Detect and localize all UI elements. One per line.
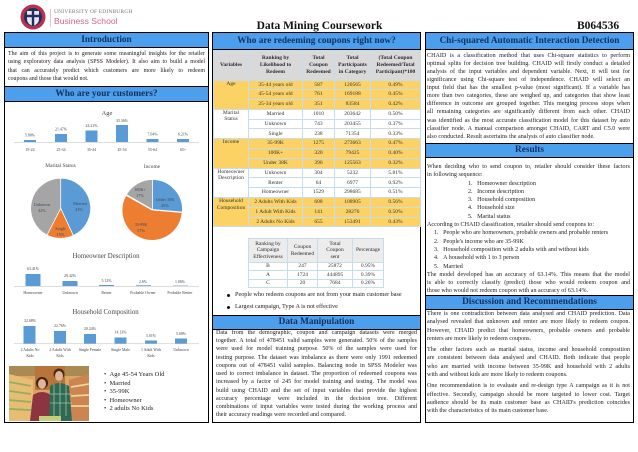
text: CHAID description: all remaining categories are significantly different from each other. CHAID <box>427 109 630 115</box>
list: campaign insights: Largest campaign, Type A is not effective <box>235 303 338 310</box>
text: data manipulation: combinations of input variables were tested during the working process and <box>216 404 417 410</box>
bar chart: homeowner description: Homeowner <box>23 291 43 295</box>
table: campaign effectiveness: B <box>266 263 270 269</box>
table: campaign effectiveness: 1724 <box>297 272 308 278</box>
list: typical customer traits <box>104 371 164 412</box>
text: data manipulation: accuracy percentage were included in the decision tree. Different <box>216 396 417 402</box>
table: likelihood to redeem: 35-99K <box>267 140 284 146</box>
bar chart: age: Age <box>102 110 113 117</box>
text: results: in following sequence: <box>427 172 483 178</box>
pie chart: income: 17% <box>136 193 144 198</box>
table: likelihood to redeem: 0.50% <box>388 209 403 215</box>
table: campaign effectiveness: Coupon <box>326 247 344 253</box>
table: likelihood to redeem: 71354 <box>346 131 359 137</box>
text: data manipulation: increased by a factor of 245 for model training and testing. The model was <box>216 379 417 385</box>
list: typical customer traits: • Age 45-54 Years Old <box>104 371 164 378</box>
text: results: 3. Household composition <box>468 197 535 203</box>
text: results: 5. Marital status <box>468 214 510 220</box>
bar chart: household composition: Single Male <box>111 348 130 352</box>
table: likelihood to redeem: 1 Adult With Kids <box>255 209 296 215</box>
text: introduction: The aim of this project is to generate some meaningful insights for the retailer <box>8 50 205 56</box>
table: campaign effectiveness: 7684 <box>330 280 340 286</box>
table: likelihood to redeem: 120565 <box>344 82 361 88</box>
bar chart: age: 35-44 <box>87 148 96 152</box>
table: campaign effectiveness: A <box>266 272 270 278</box>
table: likelihood to redeem: 0.92% <box>388 180 403 186</box>
table: likelihood to redeem: Unknown <box>265 121 286 127</box>
bar chart: household composition: Single Female <box>79 348 101 352</box>
table: campaign effectiveness: 0.39% <box>361 272 375 278</box>
table: campaign effectiveness: C <box>266 280 270 286</box>
bar chart: age: 6.21% <box>178 132 189 136</box>
table: campaign effectiveness: 0.26% <box>361 280 375 286</box>
table: campaign effectiveness: Redeemed <box>291 250 314 256</box>
bar chart: household composition: 32.08% <box>24 319 37 323</box>
table: likelihood to redeem: 5232 <box>347 170 358 176</box>
table: likelihood to redeem: 273663 <box>344 140 361 146</box>
table: likelihood to redeem: 0.43% <box>388 219 403 225</box>
text: results: 3. Household composition with 2 adults with and without kids <box>434 247 589 253</box>
text: introduction: coupons and those that would not. <box>8 76 88 82</box>
table: likelihood to redeem: 0.49% <box>388 82 403 88</box>
bar chart: age: 65+ <box>180 148 186 152</box>
table: likelihood to redeem: Single <box>268 131 283 137</box>
list: typical customer traits: • Homeowner <box>104 397 142 404</box>
text: CHAID description: optimal splits for decision tree building. CHAID will firstly conduct a detailed <box>427 61 630 67</box>
text: data manipulation: Data from the demographic, coupon and campaign datasets were merged <box>216 330 417 336</box>
bar chart: household composition: 20.24% <box>84 327 97 331</box>
text: introduction: using exploratory data analysis (SPSS Modeler). It also aim to build a model <box>8 59 205 65</box>
panel: middle column <box>212 32 421 423</box>
bar chart: homeowner description <box>14 253 199 295</box>
table: likelihood to redeem: Age <box>226 80 236 86</box>
bar chart: household composition: 5.01% <box>146 334 157 338</box>
table: likelihood to redeem: 238 <box>314 131 323 137</box>
heading: Results: Results <box>515 145 544 155</box>
text: discussion: One recommendation is to evaluate and re-design type A campaign as it is not <box>427 383 630 389</box>
table: campaign effectiveness: 444895 <box>327 272 343 278</box>
table: likelihood to redeem: Redeem <box>266 69 285 75</box>
table: likelihood to redeem: 0.42% <box>388 101 403 107</box>
heading: Introduction: Introduction <box>81 35 132 45</box>
bar chart: age: 45-54 <box>117 148 127 152</box>
table: campaign effectiveness: Effectiveness <box>253 254 283 260</box>
bar chart: household composition: Household Composition <box>72 309 139 316</box>
pie chart: marital status: 43% <box>75 207 83 212</box>
table: likelihood to redeem: 1010 <box>313 111 324 117</box>
bar chart: age: 7.04% <box>147 132 158 136</box>
bar chart: household composition: 2 Adults No <box>21 348 39 352</box>
text: data manipulation: build using CHAID and the set of input variables that provide the highest <box>216 388 417 394</box>
text: CHAID description: classifier node. A manual comparison amongst CHAID, CART and C5.0 were <box>427 126 630 132</box>
table: likelihood to redeem: Under 38K <box>263 160 288 166</box>
pie chart: marital status: Single <box>55 226 66 231</box>
text: introduction <box>8 50 205 82</box>
heading: Chi-squared Automatic Interaction Detection: Chi-squared Automatic Interaction Detection <box>440 36 619 46</box>
table: likelihood to redeem: 203642 <box>344 111 361 117</box>
text: data manipulation: testing purpose. The dataset was imbalance as there were only 1991 redeemed <box>216 355 417 361</box>
pie chart: marital status: Married <box>73 201 88 206</box>
text: discussion: However, CHAID predict that homeowners, probable owners and probable <box>427 328 630 334</box>
pie chart: marital status: 42% <box>38 208 46 213</box>
heading: Introduction <box>4 32 209 48</box>
heading: Who are redeeming coupons right now?: Who are redeeming coupons right now? <box>237 36 396 46</box>
charts: customer profile <box>14 110 199 358</box>
pie chart: income: Income <box>144 164 161 170</box>
text: discussion: effective. Secondly, campaign should be more targeted to lower cost. Target <box>427 392 630 398</box>
table: likelihood to redeem: 79425 <box>346 150 359 156</box>
text: discussion: are consistent between data analysed and CHAID. Both indicate that people <box>427 355 630 361</box>
table: likelihood to redeem: 35-44 years old <box>258 82 293 88</box>
heading: Who are your customers? <box>4 86 209 102</box>
text: results <box>427 164 630 294</box>
table: likelihood to redeem: 587 <box>314 82 323 88</box>
pie chart: income: 35-99K <box>135 222 147 227</box>
table: likelihood to redeem: Renter <box>268 180 283 186</box>
table: likelihood to redeem: Unknown <box>265 170 286 176</box>
table: likelihood to redeem: Income <box>223 139 239 145</box>
table: likelihood to redeem: 0.47% <box>388 140 403 146</box>
bar chart: homeowner description: 5.12% <box>101 279 112 283</box>
table: likelihood to redeem: 203455 <box>344 121 361 127</box>
table: likelihood to redeem: 0.37% <box>388 121 403 127</box>
table: likelihood to redeem: Participant)*100 <box>376 69 415 75</box>
bar chart: household composition: Kids <box>147 354 155 358</box>
bar chart: homeowner description: Homeowner Description <box>72 253 140 260</box>
text: discussion: who are married with income between 35-99K and household with 2 adults <box>427 364 630 370</box>
table: likelihood to redeem: in Category <box>339 69 366 75</box>
table: likelihood to redeem: 108905 <box>344 199 361 205</box>
table: campaign effectiveness: sent <box>331 254 339 260</box>
bar chart: household composition: Kids <box>56 354 64 358</box>
pie chart: marital status: 15% <box>57 232 65 237</box>
table: likelihood to redeem: Likelihood to <box>260 62 291 68</box>
table: likelihood to redeem: 64 <box>316 180 321 186</box>
bar chart: household composition: 1 Adult With <box>141 348 161 352</box>
table: campaign effectiveness: 25872 <box>328 263 342 269</box>
text: data manipulation <box>216 330 417 418</box>
bar chart: homeowner description: Probable Owner <box>130 291 156 295</box>
table: likelihood to redeem: 25-34 years old <box>258 101 293 107</box>
bar chart: household composition: 14.13% <box>114 330 127 334</box>
table: campaign effectiveness: Ranking by <box>255 241 281 247</box>
pie chart: income: 26% <box>161 203 169 208</box>
bar chart: age: 5.80% <box>25 134 36 138</box>
panel: left column <box>4 32 209 423</box>
bar chart: homeowner description: Probable Renter <box>167 291 193 295</box>
text: results: those who would not redeem coupon with an accuracy of 63.14%. <box>427 288 588 294</box>
table: likelihood to redeem: 100K+ <box>268 150 283 156</box>
bar chart: age: 25-34 <box>56 148 66 152</box>
bar chart: age: 24.21% <box>86 124 98 128</box>
table: likelihood to redeem: 761 <box>314 91 323 97</box>
table: likelihood to redeem: 1275 <box>313 140 324 146</box>
bar chart: household composition: 5.68% <box>176 332 187 336</box>
table: likelihood to redeem: 5.81% <box>388 170 403 176</box>
list: campaign insights <box>227 291 402 310</box>
pie chart: income: 100K+ <box>134 187 146 192</box>
pie chart: income <box>122 164 182 240</box>
table: campaign effectiveness: Total <box>329 241 341 247</box>
table: likelihood to redeem: Total <box>312 55 325 61</box>
text: data manipulation: their accuracy readings were recorded and compared. <box>216 412 346 418</box>
logo: University of Edinburgh Business School: UNIVERSITY OF EDINBURGH <box>54 9 133 15</box>
heading: Data Manipulation: Data Manipulation <box>279 317 354 327</box>
table: likelihood to redeem: Homeowner <box>217 169 245 175</box>
table: likelihood to redeem: 83584 <box>346 101 359 107</box>
text: CHAID description: was identified as the most accurate classification model for this dataset by auto <box>427 118 630 124</box>
bar chart: age: 35.36% <box>116 119 129 123</box>
table: likelihood to redeem: 0.33% <box>388 131 403 137</box>
table: likelihood to redeem: 608 <box>314 199 323 205</box>
text: results: 4. Household size <box>468 205 515 211</box>
logo: University of Edinburgh Business School <box>20 4 133 30</box>
list: typical customer traits: • Married <box>104 380 130 387</box>
bar chart: homeowner description: 2.6% <box>139 280 148 284</box>
text: results: 2. People's income who are 35-99K <box>434 239 524 245</box>
text: results: is able to correctly classify (predict) those who would redeem coupon and <box>427 280 630 286</box>
text: data manipulation: used to correct imbalance in dataset. The proportion of redeemed coupons was <box>216 371 417 377</box>
table: likelihood to redeem: 45-54 years old <box>258 91 293 97</box>
heading: Discussion and Recommendations: Discussion and Recommendations <box>462 297 597 307</box>
text: discussion: There is one contradiction between data analysed and CHAID prediction. Data <box>427 311 630 317</box>
pie chart: marital status: Marital Status <box>45 163 76 169</box>
table: likelihood to redeem: (Total Coupon <box>379 55 412 61</box>
table: likelihood to redeem: Composition <box>217 205 245 211</box>
heading: Discussion and Recommendations <box>425 295 634 310</box>
table: likelihood to redeem: 141 <box>314 209 323 215</box>
table: likelihood to redeem: Married <box>267 111 284 117</box>
text: data manipulation: together. A total of 478451 valid samples were generated. 50% of the samples <box>216 338 417 344</box>
table: likelihood to redeem: 0.51% <box>388 189 403 195</box>
text: CHAID description: input field that has the smallest p-value (most significant). If a variable has <box>427 85 630 91</box>
bar chart: age: 55-64 <box>148 148 157 152</box>
bar chart: age: 19-24 <box>25 148 35 152</box>
text: CHAID description: CHAID is a classification method that uses Chi-square statistics to perform <box>427 52 630 58</box>
table: likelihood to redeem: 655 <box>314 219 323 225</box>
text: discussion: with the characteristics of its main customer base. <box>427 408 548 414</box>
text: discussion: analysed revealed that unknown and renter are more likely to redeem coupon. <box>427 319 630 325</box>
bar chart: household composition <box>14 309 199 358</box>
heading: Data Manipulation <box>212 315 421 330</box>
pie chart: income: Under 38K <box>156 197 174 202</box>
table: likelihood to redeem: Redeemed/Total <box>376 62 414 68</box>
bar chart: household composition: Unknown <box>173 348 189 352</box>
table: likelihood to redeem: 304 <box>314 170 323 176</box>
text: discussion: audience should be its main customer base as CHAID's prediction coincides <box>427 400 630 406</box>
table: likelihood to redeem: Homeowner <box>262 189 289 195</box>
bar chart: homeowner description: 29.42% <box>64 274 77 278</box>
table: likelihood to redeem <box>213 50 421 227</box>
photo: couple shopping in a store <box>9 366 89 421</box>
list: campaign insights: People who redeem coupons are not from your main customer base <box>235 291 402 298</box>
table: likelihood to redeem: Status <box>224 116 238 122</box>
text: CHAID description: also conducted. Result ascertains the analysis of auto classifier node. <box>427 134 595 140</box>
table: likelihood to redeem: Marital <box>223 110 239 116</box>
table: likelihood to redeem: 351 <box>314 101 323 107</box>
table: likelihood to redeem: 0.32% <box>388 160 403 166</box>
title: Data Mining Coursework <box>257 20 382 32</box>
table: likelihood to redeem: Coupon <box>309 62 328 68</box>
pie chart: income: 57% <box>137 228 145 233</box>
table: campaign effectiveness: 0.95% <box>361 263 375 269</box>
student number: B064536 <box>577 20 619 32</box>
text: discussion <box>427 310 630 414</box>
pie chart: marital status <box>31 163 91 238</box>
table: likelihood to redeem: 298685 <box>344 189 361 195</box>
table: likelihood to redeem: 169188 <box>344 91 361 97</box>
text: results: When deciding who to send coupon to, retailer should consider these factors <box>427 164 630 170</box>
text: results: 1. Homeowner description <box>468 181 536 187</box>
table: likelihood to redeem: Participants <box>338 62 367 68</box>
text: CHAID description: more than two categories, these are weighed up, and categories that show least <box>427 93 630 99</box>
table: campaign effectiveness: 20 <box>300 280 305 286</box>
text: CHAID description <box>427 52 630 140</box>
text: results: 1. People who are homeowners, probable owners and probable renters <box>434 230 608 236</box>
table: campaign effectiveness: Campaign <box>257 247 279 253</box>
table: likelihood to redeem: Total <box>346 55 359 61</box>
bar chart: age: 21.47% <box>55 128 68 132</box>
table: likelihood to redeem: Description <box>218 175 244 181</box>
heading: Results <box>425 143 634 158</box>
bar chart: homeowner description: Unknown <box>62 291 78 295</box>
text: data manipulation: coupons out of 478451 valid samples. Balancing node in SPSS Modeler was <box>216 363 417 369</box>
table: likelihood to redeem: 125563 <box>344 160 361 166</box>
bar chart: household composition: 22.76% <box>54 324 67 328</box>
text: results: 4. A household with 1 to 3 person <box>434 255 519 261</box>
bar chart: homeowner description: 63.41% <box>27 267 40 271</box>
table: campaign effectiveness <box>248 238 384 288</box>
table: likelihood to redeem: 0.50% <box>388 111 403 117</box>
list: typical customer traits: • 2 adults No Kids <box>104 405 153 412</box>
table: likelihood to redeem: 0.45% <box>388 91 403 97</box>
heading: Chi-squared Automatic Interaction Detection <box>425 32 634 50</box>
table: likelihood to redeem: 28276 <box>346 209 359 215</box>
table: campaign effectiveness: Coupon <box>294 244 311 250</box>
bar chart: homeowner description: 1.06% <box>175 280 186 284</box>
list: typical customer traits: • 35-99K <box>104 388 129 395</box>
table: likelihood to redeem: 743 <box>314 121 323 127</box>
logo: University of Edinburgh Business School: Business School <box>54 16 118 26</box>
bar chart: age <box>14 110 199 152</box>
table: likelihood to redeem: 0.40% <box>388 150 403 156</box>
table: likelihood to redeem: Variables <box>220 62 242 68</box>
table: likelihood to redeem: 153491 <box>344 219 361 225</box>
table: likelihood to redeem: Ranking by <box>262 55 289 61</box>
text: discussion: renters are more likely to redeem coupons. <box>427 336 531 342</box>
table: likelihood to redeem: 6977 <box>347 180 358 186</box>
table: likelihood to redeem: 396 <box>314 160 323 166</box>
text: results: 2. Income description <box>468 189 524 195</box>
table: likelihood to redeem: 1529 <box>313 189 324 195</box>
panel: right column <box>425 32 634 423</box>
table: likelihood to redeem: Redeemed <box>306 69 331 75</box>
table: likelihood to redeem: 320 <box>314 150 323 156</box>
table: campaign effectiveness: 247 <box>298 263 307 269</box>
table: likelihood to redeem: 2 Adults No Kids <box>256 219 295 225</box>
heading: Who are your customers?: Who are your customers? <box>55 89 158 99</box>
table: likelihood to redeem: 0.56% <box>388 199 403 205</box>
text: results: 5. Married <box>434 264 463 270</box>
text: introduction: that can accurately predict which customers are more likely to redeem <box>8 68 205 74</box>
bar chart: homeowner description: Renter <box>101 291 112 295</box>
text: discussion: The other factors such as marital status, income and household composition <box>427 347 630 353</box>
table: campaign effectiveness: Percentage <box>356 247 380 253</box>
text: discussion: with and without kids are more likely to redeem coupons. <box>427 372 567 378</box>
text: results: The model developed has an accuracy of 63.14%. This means that the model <box>427 272 630 278</box>
text: data manipulation: were used for model training purpose. 50% of the samples were used for <box>216 346 417 352</box>
text: CHAID description: significance using Chi-square test of independence. CHAID will select an <box>427 77 630 83</box>
text: CHAID description: difference in outcome are grouped together. This merging process stops when <box>427 101 630 107</box>
text: results: According to CHAID classification, retailer should send coupons to: <box>427 222 594 228</box>
text: CHAID description: analysis of the input variables and dependent variable. Next, it will test for <box>427 69 630 75</box>
bar chart: household composition: 2 Adults With <box>49 348 71 352</box>
pie chart: marital status: Unknown <box>34 202 51 207</box>
heading: Who are redeeming coupons right now? <box>212 32 421 50</box>
bar chart: household composition: Kids <box>26 354 34 358</box>
table: likelihood to redeem: Household <box>219 198 243 204</box>
table: likelihood to redeem: 2 Adults With Kids <box>254 199 297 205</box>
